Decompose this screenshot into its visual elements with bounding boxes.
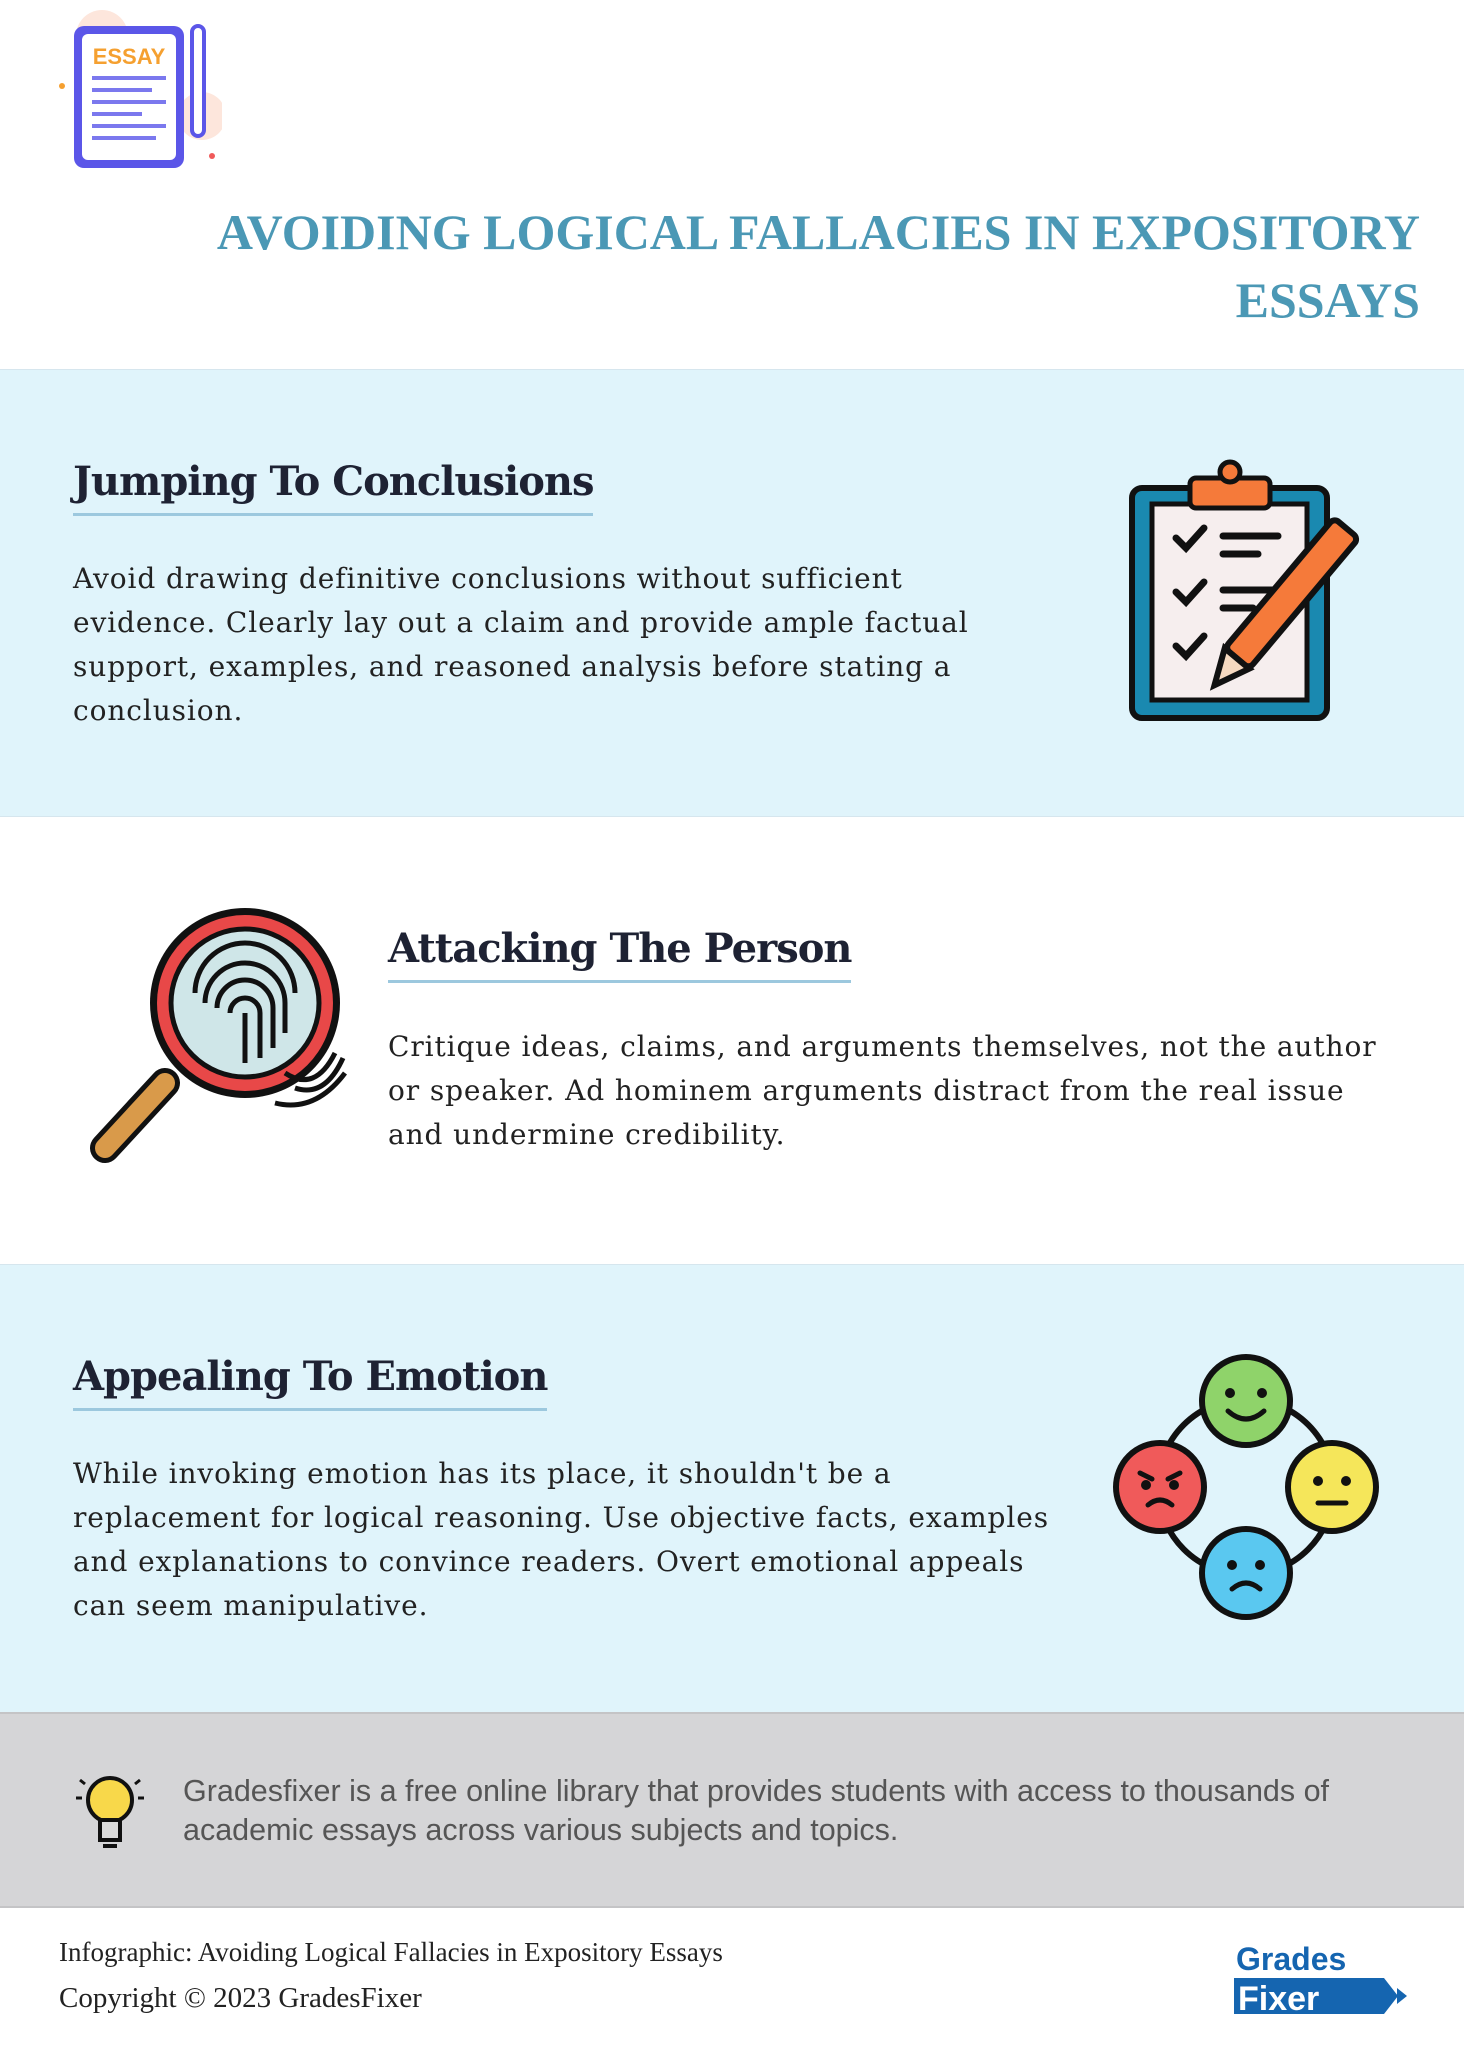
text: footer description: Gradesfixer is a free online library that provides students with access to thousands of <box>183 1774 1329 1808</box>
panel: footer info <box>0 1712 1464 1908</box>
text: emotion body: and explanations to convince readers. Overt emotional appeals <box>73 1545 1024 1578</box>
title: ESSAYS <box>1236 272 1420 328</box>
text: emotion body: replacement for logical reasoning. Use objective facts, examples <box>73 1501 1049 1534</box>
text: jumping body: conclusion. <box>73 694 243 727</box>
icon: essay document <box>59 10 222 168</box>
text: infographic caption: Infographic: Avoiding Logical Fallacies in Expository Essays <box>59 1937 723 1967</box>
logo: gradesfixer <box>1234 1941 1407 2018</box>
text: jumping body: evidence. Clearly lay out a claim and provide ample factual <box>73 606 969 639</box>
heading: jumping to conclusions: Jumping To Conclusions <box>73 458 593 505</box>
title: AVOIDING LOGICAL FALLACIES IN EXPOSITORY <box>217 204 1420 260</box>
logo: gradesfixer: Fixer <box>1238 1980 1319 2018</box>
text: footer description <box>183 1774 1329 1847</box>
panel: attacking the person <box>0 817 1464 1264</box>
text: copyright: Copyright © 2023 GradesFixer <box>59 1982 422 2014</box>
text: jumping body <box>72 562 969 727</box>
text: emotion body: can seem manipulative. <box>73 1589 428 1622</box>
heading: attacking the person: Attacking The Person <box>388 925 851 972</box>
text: jumping body: support, examples, and reasoned analysis before stating a <box>73 650 951 683</box>
text: jumping body: Avoid drawing definitive conclusions without sufficient <box>73 562 903 595</box>
icon: magnifier fingerprint <box>90 908 347 1163</box>
text: attacking body: Critique ideas, claims, and arguments themselves, not the author <box>388 1030 1376 1063</box>
text: attacking body: or speaker. Ad hominem arguments distract from the real issue <box>388 1074 1344 1107</box>
icon: emotion faces <box>1113 1354 1379 1620</box>
icon: essay document: ESSAY <box>93 44 166 69</box>
panel: appealing to emotion <box>0 1264 1464 1712</box>
logo: gradesfixer: Grades <box>1236 1941 1346 1977</box>
icon: clipboard <box>1129 460 1360 721</box>
heading: appealing to emotion: Appealing To Emotion <box>73 1353 547 1400</box>
text: footer description: academic essays across various subjects and topics. <box>183 1813 898 1847</box>
text: emotion body <box>73 1457 1049 1622</box>
text: attacking body <box>388 1030 1376 1151</box>
panel: jumping to conclusions <box>0 369 1464 817</box>
icon: light bulb <box>76 1776 144 1848</box>
text: emotion body: While invoking emotion has its place, it shouldn't be a <box>73 1457 891 1490</box>
title <box>217 204 1420 328</box>
text: attacking body: and undermine credibility. <box>388 1118 785 1151</box>
